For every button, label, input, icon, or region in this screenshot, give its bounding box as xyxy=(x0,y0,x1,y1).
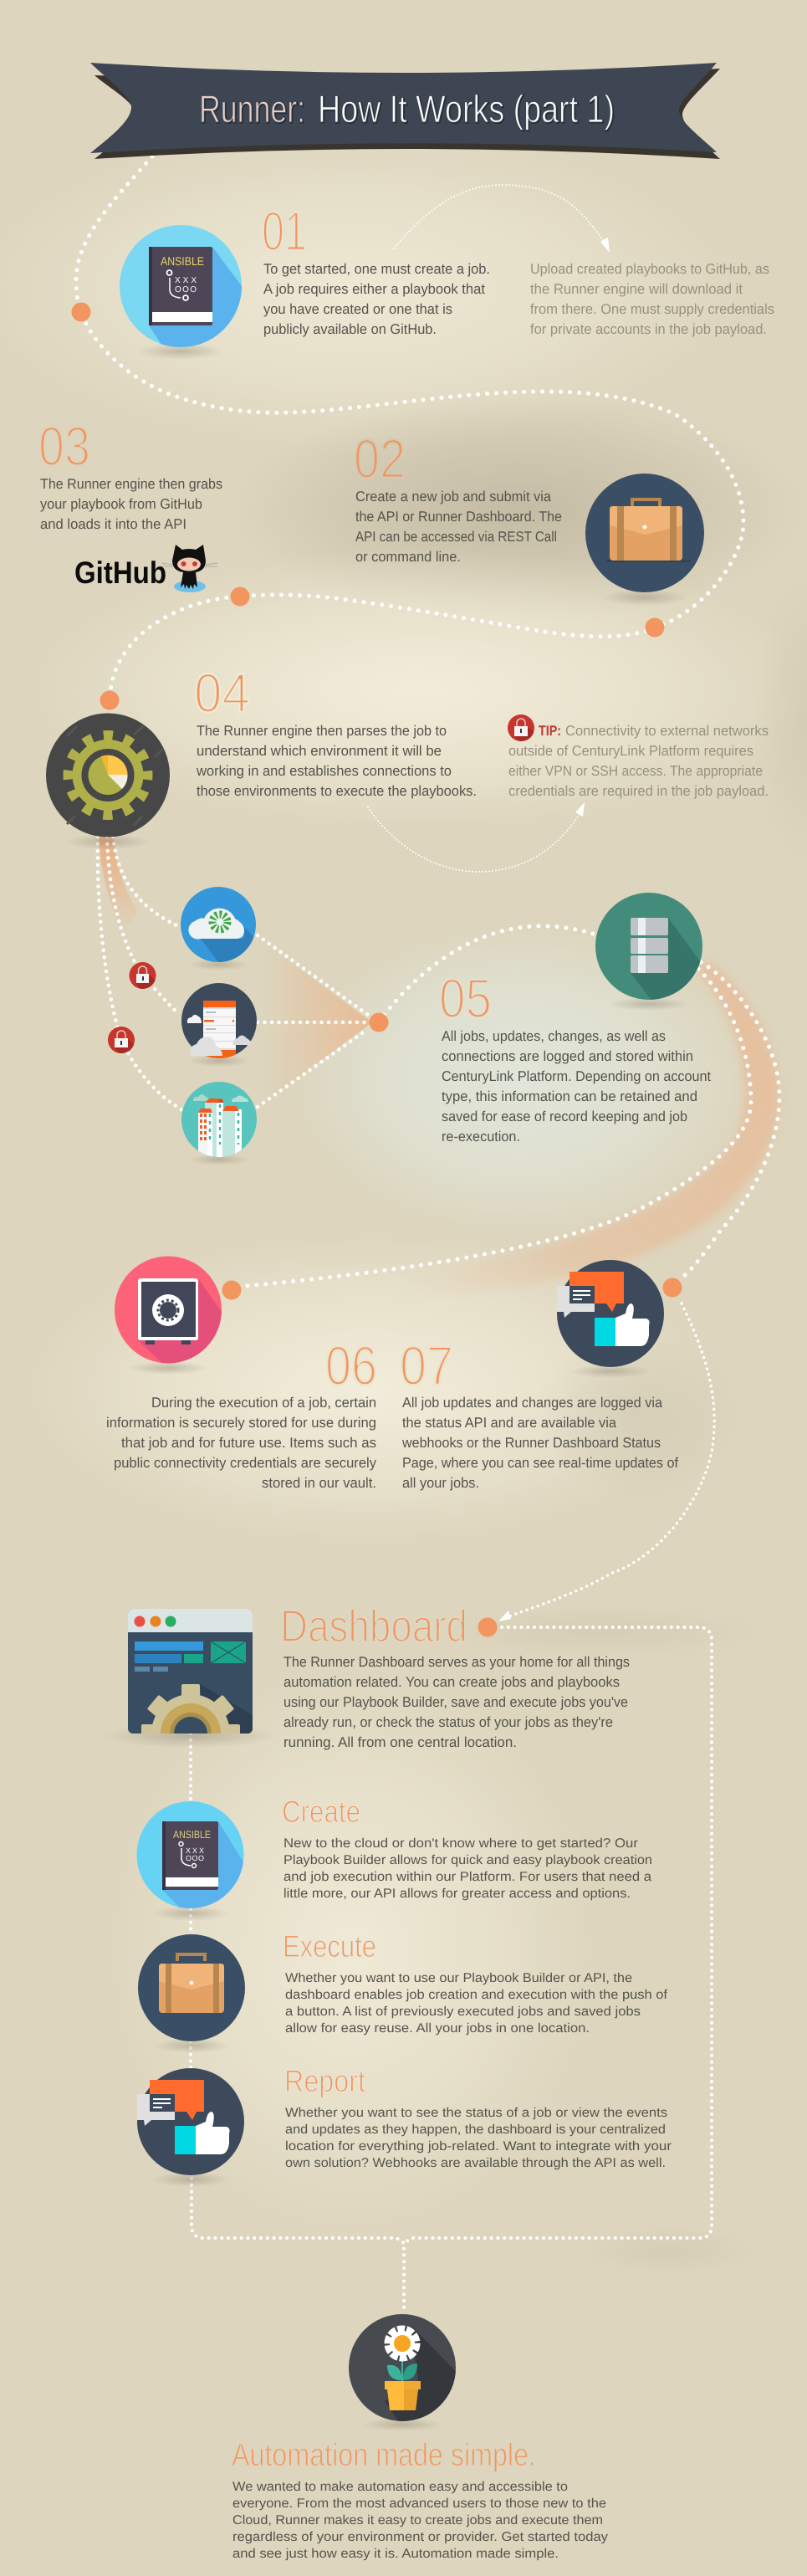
step 07 text: Page, where you can see real-time updates of xyxy=(402,1455,678,1471)
step 05 text: saved for ease of record keeping and job xyxy=(442,1109,687,1124)
connector: updates to dashboard xyxy=(498,1303,714,1621)
dashboard heading and text: automation related. You can create jobs and playbooks xyxy=(283,1674,620,1690)
step 01 text: publicly available on GitHub. xyxy=(263,321,437,337)
step 06 text: that job and for future use. Items such as xyxy=(121,1435,376,1451)
step 07 text: All job updates and changes are logged via xyxy=(402,1395,663,1411)
arrow: connection arc xyxy=(368,802,585,872)
closing heading and text: Automation made simple. xyxy=(232,2438,536,2473)
step 07 icon: updates and thumbs up xyxy=(557,1260,664,1378)
step 02 text: API can be accessed via REST Call xyxy=(355,529,557,545)
step 04 text: The Runner engine then parses the job to xyxy=(197,723,447,739)
orange path nodes xyxy=(72,303,682,1636)
step 02 text: Create a new job and submit via xyxy=(355,489,552,504)
step 07 text: 07 xyxy=(400,1334,453,1396)
step 05 text: 05 xyxy=(439,967,492,1029)
report text xyxy=(284,2064,672,2170)
closing heading and text: We wanted to make automation easy and accessible to xyxy=(232,2480,568,2494)
dashboard heading and text: already run, or check the status of your jobs as they're xyxy=(283,1714,613,1730)
step 05 text: type, this information can be retained and xyxy=(442,1088,697,1104)
closing heading and text: Cloud, Runner makes it easy to create jobs and execute them xyxy=(232,2513,603,2527)
create text: and job execution within our Platform. For users that need a xyxy=(283,1870,651,1884)
GitHub logo with mascot xyxy=(74,545,217,592)
step 04 text: working in and establishes connections to xyxy=(196,763,452,779)
step 01 text: 01 xyxy=(262,200,307,262)
execute text xyxy=(283,1929,668,2036)
step 05 text xyxy=(439,967,711,1145)
step 06 text: During the execution of a job, certain xyxy=(151,1395,376,1411)
step 01 icon: playbook: ANSIBLE xyxy=(161,254,204,268)
step 06 text: information is securely stored for use during xyxy=(106,1415,376,1431)
step 04 icon: gear with pie xyxy=(46,713,170,849)
create text: Create xyxy=(282,1795,360,1829)
dashboard heading and text: running. All from one central location. xyxy=(283,1734,517,1750)
arrow: upload arc xyxy=(394,185,610,253)
closing heading and text: and see just how easy it is. Automation made simple. xyxy=(232,2547,559,2561)
create icon: playbook: OOO xyxy=(186,1854,204,1862)
step 05 text: re-execution. xyxy=(442,1129,520,1145)
step 05 icon: storage xyxy=(595,893,702,1009)
step 06 text xyxy=(106,1334,377,1491)
step 03 text: and loads it into the API xyxy=(40,516,186,532)
tip callout: TIP: xyxy=(539,723,561,739)
environment icon: data center buildings xyxy=(181,1082,257,1165)
orange glow bands xyxy=(99,837,779,1295)
dashboard heading and text: Dashboard xyxy=(280,1601,467,1652)
tip callout xyxy=(508,714,769,799)
title banner xyxy=(90,63,720,159)
step 02 text: the API or Runner Dashboard. The xyxy=(355,509,562,525)
title banner: Runner: xyxy=(199,87,305,131)
step 04 text: 04 xyxy=(194,662,250,724)
step 03 text: The Runner engine then grabs xyxy=(40,476,222,492)
step 02 text: or command line. xyxy=(355,549,461,565)
step 05 text: All jobs, updates, changes, as well as xyxy=(442,1028,666,1044)
tip callout: Connectivity to external networks xyxy=(565,723,769,739)
step 06 text: public connectivity credentials are securely xyxy=(114,1455,376,1471)
step 05 text: connections are logged and stored within xyxy=(442,1048,693,1064)
upload note: the Runner engine will download it xyxy=(530,281,743,297)
create icon: playbook: XXX xyxy=(186,1846,204,1855)
create text: Playbook Builder allows for quick and easy playbook creation xyxy=(283,1853,652,1867)
dashboard heading and text xyxy=(280,1601,630,1750)
step 03 text xyxy=(38,415,222,532)
report text: location for everything job-related. Want to integrate with your xyxy=(285,2139,672,2153)
security locks xyxy=(108,962,156,1053)
connector: main dotted path from banner to gear xyxy=(76,156,743,700)
step 01 text: To get started, one must create a job. xyxy=(263,261,490,277)
tip callout: either VPN or SSH access. The appropriate xyxy=(508,763,763,779)
upload note: from there. One must supply credentials xyxy=(530,301,774,317)
create text: New to the cloud or don't know where to get started? Our xyxy=(283,1836,638,1851)
step 07 text xyxy=(400,1334,678,1491)
step 01 text xyxy=(262,200,490,337)
report text: Report xyxy=(284,2064,366,2098)
step 02 icon: briefcase xyxy=(585,474,704,606)
environment icon: application in cloud xyxy=(181,983,257,1067)
step 04 text: those environments to execute the playbooks. xyxy=(197,783,477,799)
step 04 text: understand which environment it will be xyxy=(197,743,442,759)
closing heading and text xyxy=(232,2438,608,2561)
step 04 text xyxy=(194,662,477,799)
create text: little more, our API allows for greater access and options. xyxy=(283,1887,631,1901)
GitHub logo with mascot: GitHub xyxy=(74,556,166,590)
step 01 text: you have created or one that is xyxy=(263,301,452,317)
execute icon: briefcase xyxy=(138,1934,245,2053)
execute text: Execute xyxy=(283,1929,376,1964)
step 06 text: stored in our vault. xyxy=(262,1475,376,1491)
report icon: updates and thumbs up xyxy=(137,2068,244,2187)
step 07 text: all your jobs. xyxy=(402,1475,479,1491)
upload note: for private accounts in the job payload. xyxy=(530,321,767,337)
dashboard heading and text: using our Playbook Builder, save and execute jobs you've xyxy=(283,1694,628,1710)
report text: Whether you want to see the status of a job or view the events xyxy=(285,2106,667,2120)
step 03 text: 03 xyxy=(38,415,90,477)
step 06 icon: vault xyxy=(115,1257,222,1374)
step 01 icon: playbook: OOO xyxy=(175,285,197,294)
execute text: dashboard enables job creation and execution with the push of xyxy=(285,1988,668,2002)
dashboard icon xyxy=(124,1609,259,1746)
step 01 icon: playbook xyxy=(120,225,242,358)
connector: dashboard box xyxy=(191,1627,712,2312)
upload note: Upload created playbooks to GitHub, as xyxy=(530,261,769,277)
execute text: allow for easy reuse. All your jobs in one location. xyxy=(285,2021,590,2036)
step 01 icon: playbook: XXX xyxy=(175,276,197,285)
step 06 text: 06 xyxy=(325,1334,377,1396)
report text: and updates as they happen, the dashboard is your centralized xyxy=(285,2123,666,2137)
connector: node to storage and on to vault and updates xyxy=(247,926,779,1286)
title banner: How It Works (part 1) xyxy=(318,87,615,131)
create text xyxy=(282,1795,652,1901)
closing heading and text: everyone. From the most advanced users to those new to the xyxy=(232,2497,606,2511)
closing heading and text: regardless of your environment or provider. Get started today xyxy=(232,2530,608,2544)
tip callout: outside of CenturyLink Platform requires xyxy=(508,743,753,759)
connector: gear to environments xyxy=(98,837,368,1110)
environment icon: CenturyLink cloud xyxy=(181,887,256,969)
step 02 text: 02 xyxy=(354,428,406,489)
step 05 text: CenturyLink Platform. Depending on account xyxy=(442,1068,711,1084)
closing icon: flower xyxy=(349,2314,456,2430)
create icon: playbook xyxy=(137,1801,251,1921)
step 07 text: the status API and are available via xyxy=(402,1415,617,1431)
execute text: a button. A list of previously executed jobs and saved jobs xyxy=(285,2005,641,2019)
upload note xyxy=(530,261,774,337)
tip callout: credentials are required in the job payload. xyxy=(508,783,769,799)
step 03 text: your playbook from GitHub xyxy=(40,496,202,512)
step 01 text: A job requires either a playbook that xyxy=(263,281,485,297)
step 07 text: webhooks or the Runner Dashboard Status xyxy=(401,1435,661,1451)
report text: own solution? Webhooks are available through the API as well. xyxy=(285,2156,666,2170)
step 02 text xyxy=(354,428,562,565)
dashboard heading and text: The Runner Dashboard serves as your home for all things xyxy=(283,1654,630,1670)
create icon: playbook: ANSIBLE xyxy=(173,1829,211,1841)
execute text: Whether you want to use our Playbook Builder or API, the xyxy=(285,1971,632,1985)
